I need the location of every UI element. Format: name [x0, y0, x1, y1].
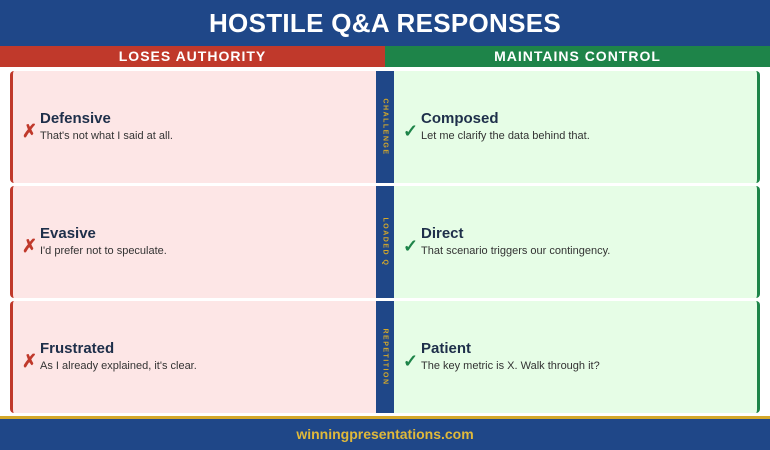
panel: composed: [394, 71, 760, 183]
panel: defensive: ✗: [22, 121, 37, 141]
panel: composed: Composed: [421, 110, 499, 127]
panel: direct: [394, 186, 760, 298]
panel: defensive: Defensive: [40, 110, 111, 127]
label: repetition: [376, 301, 394, 413]
panel: composed: ✓: [403, 121, 418, 141]
heading: loses authority: LOSES AUTHORITY: [119, 48, 266, 64]
title: [0, 0, 770, 46]
panel: direct: ✓: [403, 236, 418, 256]
heading: maintains control: MAINTAINS CONTROL: [494, 48, 661, 64]
panel: defensive: [10, 71, 377, 183]
panel: frustrated: [10, 301, 377, 413]
label: loaded q: [376, 186, 394, 298]
panel: patient: Patient: [421, 340, 471, 357]
heading: loses authority: [0, 46, 385, 67]
panel: patient: [394, 301, 760, 413]
footer: [0, 416, 770, 450]
panel: patient: The key metric is X. Walk through it?: [421, 360, 600, 372]
panel: frustrated: ✗: [22, 351, 37, 371]
footer: winningpresentations.com: [296, 426, 474, 442]
panel: patient: ✓: [403, 351, 418, 371]
title: HOSTILE Q&A RESPONSES: [209, 8, 561, 38]
label: challenge: CHALLENGE: [382, 98, 388, 156]
panel: defensive: That's not what I said at all.: [40, 130, 173, 142]
panel: evasive: Evasive: [40, 225, 96, 242]
label: repetition: REPETITION: [382, 328, 388, 386]
panel: composed: Let me clarify the data behind that.: [421, 130, 590, 142]
panel: evasive: I'd prefer not to speculate.: [40, 245, 167, 257]
label: loaded q: LOADED Q: [382, 218, 388, 266]
label: challenge: [376, 71, 394, 183]
heading: maintains control: [385, 46, 770, 67]
panel: frustrated: Frustrated: [40, 340, 114, 357]
panel: direct: Direct: [421, 225, 464, 242]
panel: frustrated: As I already explained, it's clear.: [40, 360, 197, 372]
panel: evasive: ✗: [22, 236, 37, 256]
panel: evasive: [10, 186, 377, 298]
panel: direct: That scenario triggers our contingency.: [421, 245, 610, 257]
